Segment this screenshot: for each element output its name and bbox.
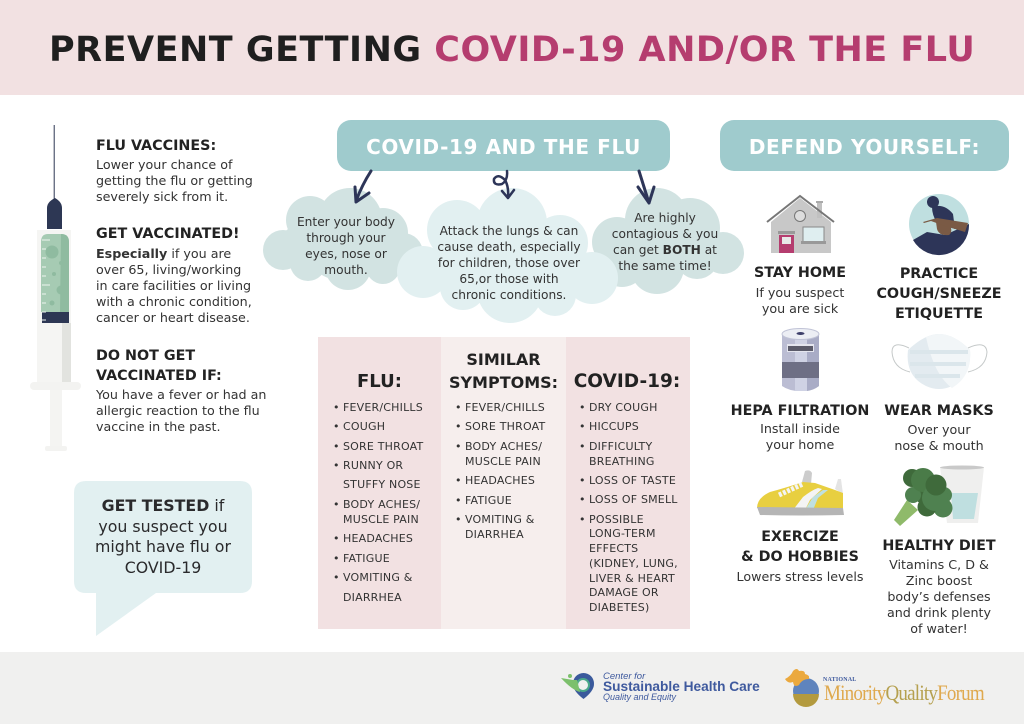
left column: do not get vaccinated: vaccine in the past. bbox=[96, 419, 221, 434]
cloud text: enter your body: Enter your body bbox=[297, 215, 395, 229]
text: cough etiquette bbox=[876, 266, 1002, 322]
footer band bbox=[0, 652, 1024, 724]
panel: flu: STUFFY NOSE bbox=[343, 478, 421, 491]
panel: flu: VOMITING & bbox=[343, 571, 413, 584]
panel: covid-19: • bbox=[579, 420, 586, 433]
text: cough etiquette: ETIQUETTE bbox=[895, 306, 983, 322]
heading: covid-19 and the flu: COVID-19 AND THE FLU bbox=[366, 135, 641, 159]
left column: get vaccinated: in care facilities or living bbox=[96, 278, 251, 292]
text: healthy diet: and drink plenty bbox=[887, 604, 991, 620]
logo: national minority quality forum: NATIONAL bbox=[823, 677, 856, 683]
cloud text: attack the lungs: for children, those over bbox=[438, 256, 580, 270]
text: wear masks: WEAR MASKS bbox=[884, 403, 994, 419]
left column: get vaccinated: with a chronic condition, bbox=[96, 294, 252, 308]
left column: do not get vaccinated: You have a fever or had an bbox=[96, 387, 266, 402]
panel: covid-19: • bbox=[579, 474, 586, 487]
left column: get vaccinated: cancer or heart disease. bbox=[96, 310, 250, 324]
callout: get tested: GET TESTED if bbox=[102, 496, 224, 515]
text: exercize bbox=[736, 529, 864, 584]
text: healthy diet: HEALTHY DIET bbox=[882, 538, 996, 554]
logo: center for sustainable health care: Quality and Equity bbox=[603, 692, 676, 702]
panel: similar symptoms: FATIGUE bbox=[465, 494, 512, 507]
left column: get vaccinated: Especially if you are bbox=[96, 246, 231, 260]
heading: covid-19 and the flu bbox=[337, 120, 670, 171]
cloud text: attack the lungs bbox=[437, 224, 581, 302]
icon: sneeze etiquette bbox=[909, 194, 969, 256]
cloud text: enter your body bbox=[297, 215, 395, 277]
panel: similar symptoms: DIARRHEA bbox=[465, 528, 524, 541]
panel: flu: • bbox=[333, 401, 340, 414]
panel: flu: RUNNY OR bbox=[343, 459, 403, 472]
icon: broccoli and water glass bbox=[894, 466, 984, 526]
icon: house bbox=[766, 194, 834, 253]
text: hepa filtration: Install inside bbox=[760, 420, 840, 436]
panel: similar symptoms: BODY ACHES/ bbox=[465, 440, 542, 453]
panel: covid-19: BREATHING bbox=[589, 455, 655, 468]
text: healthy diet: body’s defenses bbox=[887, 588, 991, 604]
panel: covid-19: POSSIBLE bbox=[589, 513, 644, 526]
panel: covid-19: • bbox=[579, 440, 586, 453]
clouds bbox=[263, 169, 744, 323]
panel: similar symptoms: • bbox=[455, 401, 462, 414]
panel: similar symptoms: • bbox=[455, 420, 462, 433]
panel: similar symptoms: SORE THROAT bbox=[465, 420, 545, 433]
text: exercize: Lowers stress levels bbox=[736, 569, 864, 584]
panel: flu: • bbox=[333, 420, 340, 433]
left column: do not get vaccinated bbox=[96, 348, 266, 434]
panel: flu: • bbox=[333, 440, 340, 453]
cloud text: highly contagious: can get BOTH at bbox=[613, 243, 717, 257]
cloud text: enter your body: eyes, nose or bbox=[305, 247, 387, 261]
panel: covid-19: DRY COUGH bbox=[589, 401, 658, 414]
logo: center for sustainable health care: Center for bbox=[603, 670, 645, 682]
panel: covid-19: (KIDNEY, LUNG, bbox=[589, 557, 678, 570]
panel: covid-19: HICCUPS bbox=[589, 420, 639, 433]
text: wear masks: nose & mouth bbox=[894, 438, 984, 452]
panel: flu: FEVER/CHILLS bbox=[343, 401, 423, 414]
left column: do not get vaccinated: DO NOT GET bbox=[96, 348, 195, 364]
panel: similar symptoms: • bbox=[455, 494, 462, 507]
panel: covid-19 bbox=[566, 337, 690, 629]
icon: syringe bbox=[30, 125, 81, 451]
text: healthy diet: of water! bbox=[910, 620, 968, 636]
cloud text: attack the lungs: cause death, especially bbox=[437, 240, 581, 254]
panel: similar symptoms: SYMPTOMS: bbox=[449, 373, 558, 392]
panel: covid-19: • bbox=[579, 493, 586, 506]
heading: defend yourself bbox=[720, 120, 1009, 171]
text: stay home: If you suspect bbox=[756, 284, 844, 300]
text: hepa filtration: your home bbox=[766, 436, 834, 452]
panel: flu: • bbox=[333, 552, 340, 565]
icon: shoe bbox=[757, 470, 844, 516]
text: wear masks bbox=[884, 403, 994, 452]
panel: covid-19: LOSS OF SMELL bbox=[589, 493, 678, 506]
left column: get vaccinated: over 65, living/working bbox=[96, 262, 241, 276]
icon: air purifier bbox=[782, 328, 820, 391]
panel: flu bbox=[318, 337, 441, 629]
panel: flu: FLU: bbox=[357, 371, 402, 392]
cloud text: highly contagious: the same time! bbox=[618, 259, 712, 273]
cloud text: highly contagious: contagious & you bbox=[612, 227, 718, 241]
header banner bbox=[0, 0, 1024, 95]
text: healthy diet: Zinc boost bbox=[906, 572, 972, 588]
cloud text: attack the lungs: Attack the lungs & can bbox=[440, 224, 578, 238]
panel: covid-19: COVID-19: bbox=[574, 371, 680, 392]
panel: covid-19: DIFFICULTY bbox=[589, 440, 652, 453]
panel: similar symptoms: HEADACHES bbox=[465, 474, 535, 487]
left column: do not get vaccinated: VACCINATED IF: bbox=[96, 368, 222, 384]
text: cough etiquette: PRACTICE bbox=[900, 266, 978, 282]
cloud text: highly contagious: Are highly bbox=[634, 211, 696, 225]
callout: get tested: COVID-19 bbox=[125, 558, 201, 576]
panel: similar symptoms: SIMILAR bbox=[466, 350, 541, 369]
callout: get tested bbox=[74, 481, 252, 636]
panel: similar symptoms: • bbox=[455, 440, 462, 453]
left column: flu vaccines bbox=[96, 138, 253, 204]
panel: covid-19: DAMAGE OR bbox=[589, 586, 659, 599]
panel: flu: SORE THROAT bbox=[343, 440, 423, 453]
panel: similar symptoms: VOMITING & bbox=[465, 513, 535, 526]
panel: flu: MUSCLE PAIN bbox=[343, 513, 419, 526]
panel: similar symptoms: • bbox=[455, 513, 462, 526]
text: exercize: EXERCIZE bbox=[761, 529, 839, 545]
left column: flu vaccines: severely sick from it. bbox=[96, 188, 228, 204]
logo: national minority quality forum: MinorityQualityForum bbox=[824, 680, 984, 705]
panel: flu: HEADACHES bbox=[343, 532, 413, 545]
panel: covid-19: • bbox=[579, 513, 586, 526]
panel: flu: FATIGUE bbox=[343, 552, 390, 565]
panel: flu: • bbox=[333, 459, 340, 472]
logo: center for sustainable health care: Sustainable Health Care bbox=[603, 679, 760, 694]
text: healthy diet: Vitamins C, D & bbox=[889, 556, 989, 572]
cloud text: attack the lungs: chronic conditions. bbox=[452, 288, 566, 302]
text: hepa filtration bbox=[731, 403, 869, 452]
callout: get tested: might have flu or bbox=[95, 537, 231, 556]
panel: covid-19: LONG-TERM bbox=[589, 527, 656, 540]
left column: get vaccinated: GET VACCINATED! bbox=[96, 226, 240, 242]
panel: similar symptoms: • bbox=[455, 474, 462, 487]
panel: flu: BODY ACHES/ bbox=[343, 498, 420, 511]
left column: flu vaccines: Lower your chance of bbox=[96, 156, 232, 172]
cloud text: enter your body: mouth. bbox=[324, 263, 368, 277]
panel: covid-19: EFFECTS bbox=[589, 542, 638, 555]
text: stay home: STAY HOME bbox=[754, 265, 846, 281]
text: stay home bbox=[754, 265, 846, 316]
text: cough etiquette: COUGH/SNEEZE bbox=[876, 286, 1002, 302]
icon: mask bbox=[892, 334, 988, 389]
cloud text: highly contagious bbox=[612, 211, 718, 273]
panel: similar symptoms: FEVER/CHILLS bbox=[465, 401, 545, 414]
cloud text: attack the lungs: 65,or those with bbox=[459, 272, 559, 286]
heading: defend yourself: DEFEND YOURSELF: bbox=[749, 135, 980, 159]
panel: flu: DIARRHEA bbox=[343, 591, 402, 604]
panel: similar symptoms bbox=[441, 337, 566, 629]
panel: covid-19: DIABETES) bbox=[589, 601, 649, 614]
callout: get tested: you suspect you bbox=[98, 516, 228, 536]
panel: similar symptoms: MUSCLE PAIN bbox=[465, 455, 541, 468]
logo: center for sustainable health care bbox=[561, 670, 760, 702]
panel: flu: • bbox=[333, 571, 340, 584]
left column: flu vaccines: getting the flu or getting bbox=[96, 172, 253, 188]
panel: flu: • bbox=[333, 532, 340, 545]
text: hepa filtration: HEPA FILTRATION bbox=[731, 403, 869, 419]
logo: national minority quality forum bbox=[785, 669, 984, 707]
panel: flu: COUGH bbox=[343, 420, 385, 433]
title: PREVENT GETTING COVID-19 AND/OR THE FLU bbox=[49, 30, 975, 70]
text: stay home: you are sick bbox=[762, 300, 838, 316]
text: wear masks: Over your bbox=[907, 422, 971, 436]
text: healthy diet bbox=[882, 538, 996, 636]
cloud text: enter your body: through your bbox=[306, 231, 386, 245]
panel: covid-19: • bbox=[579, 401, 586, 414]
panel: flu: • bbox=[333, 498, 340, 511]
panel: covid-19: LOSS OF TASTE bbox=[589, 474, 676, 487]
left column: flu vaccines: FLU VACCINES: bbox=[96, 138, 216, 154]
left column: do not get vaccinated: allergic reaction to the flu bbox=[96, 403, 260, 418]
left column: get vaccinated bbox=[96, 226, 252, 324]
panel: covid-19: LIVER & HEART bbox=[589, 572, 675, 585]
text: exercize: & DO HOBBIES bbox=[741, 548, 859, 564]
arrows bbox=[355, 171, 654, 203]
